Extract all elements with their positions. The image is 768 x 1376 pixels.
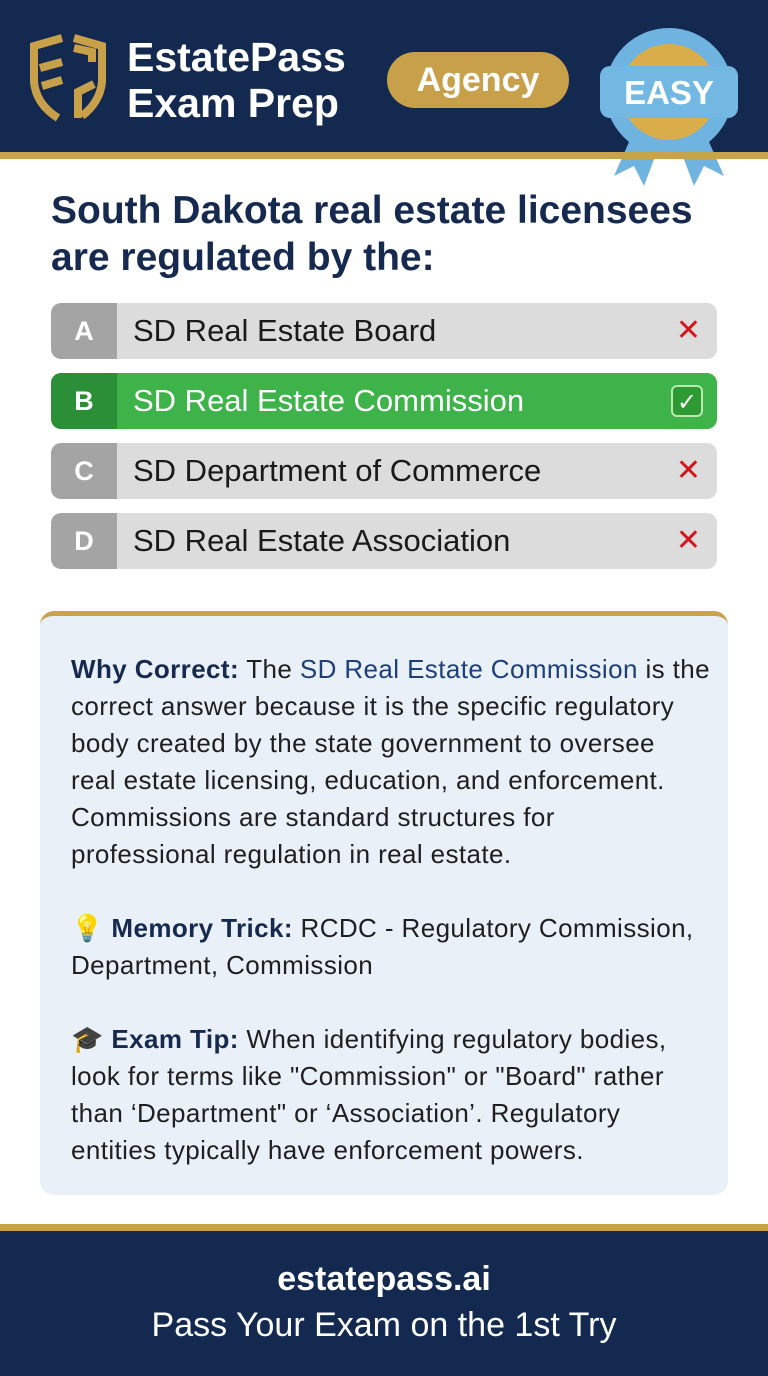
why correct text: Why Correct: The SD Real Estate Commission is the — [71, 654, 710, 684]
brand name — [127, 34, 346, 126]
option C: SD Department of Commerce — [133, 453, 541, 488]
exam tip: than ‘Department" or ‘Association’. Regulatory — [71, 1098, 620, 1128]
memory trick — [71, 913, 694, 980]
memory trick: Department, Commission — [71, 950, 373, 980]
explanation panel — [40, 611, 728, 1195]
why correct text: body created by the state government to oversee — [71, 728, 655, 758]
why correct text: real estate licensing, education, and enforcement. — [71, 765, 665, 795]
exam tip: entities typically have enforcement powers. — [71, 1135, 584, 1165]
option B correct: SD Real Estate Commission — [133, 383, 524, 418]
option B correct: ✓ — [677, 389, 697, 416]
question heading: South Dakota real estate licensees — [51, 189, 693, 232]
option D: D — [74, 526, 94, 556]
brand name: EstatePass — [127, 34, 346, 80]
category pill: Agency — [417, 61, 539, 99]
option A — [51, 303, 717, 359]
option B correct: B — [74, 386, 94, 416]
option C: ✕ — [676, 454, 701, 487]
option A: ✕ — [676, 314, 701, 347]
question heading — [51, 189, 693, 279]
brand name: Exam Prep — [127, 80, 339, 126]
option A: A — [74, 316, 94, 346]
footer url: estatepass.ai — [277, 1260, 491, 1298]
category pill — [387, 52, 569, 108]
option C — [51, 443, 717, 499]
footer — [0, 1231, 768, 1376]
option D — [51, 513, 717, 569]
difficulty badge: EASY — [624, 74, 714, 111]
why correct text: professional regulation in real estate. — [71, 839, 512, 869]
difficulty badge — [600, 28, 738, 186]
header bar — [0, 0, 768, 152]
exam tip: 🎓 Exam Tip: When identifying regulatory bodies, — [71, 1024, 667, 1054]
option B correct — [51, 373, 717, 429]
icon: shield logo — [30, 34, 106, 122]
option C: C — [74, 456, 94, 486]
memory trick: 💡 Memory Trick: RCDC - Regulatory Commission, — [71, 913, 694, 943]
why correct text: Commissions are standard structures for — [71, 802, 555, 832]
footer tagline: Pass Your Exam on the 1st Try — [152, 1306, 616, 1344]
option D: SD Real Estate Association — [133, 523, 510, 558]
exam tip — [71, 1024, 667, 1165]
exam tip: look for terms like "Commission" or "Board" rather — [71, 1061, 664, 1091]
question heading: are regulated by the: — [51, 236, 435, 279]
option D: ✕ — [676, 524, 701, 557]
why correct text — [71, 654, 710, 869]
option A: SD Real Estate Board — [133, 313, 436, 348]
why correct text: correct answer because it is the specific regulatory — [71, 691, 674, 721]
